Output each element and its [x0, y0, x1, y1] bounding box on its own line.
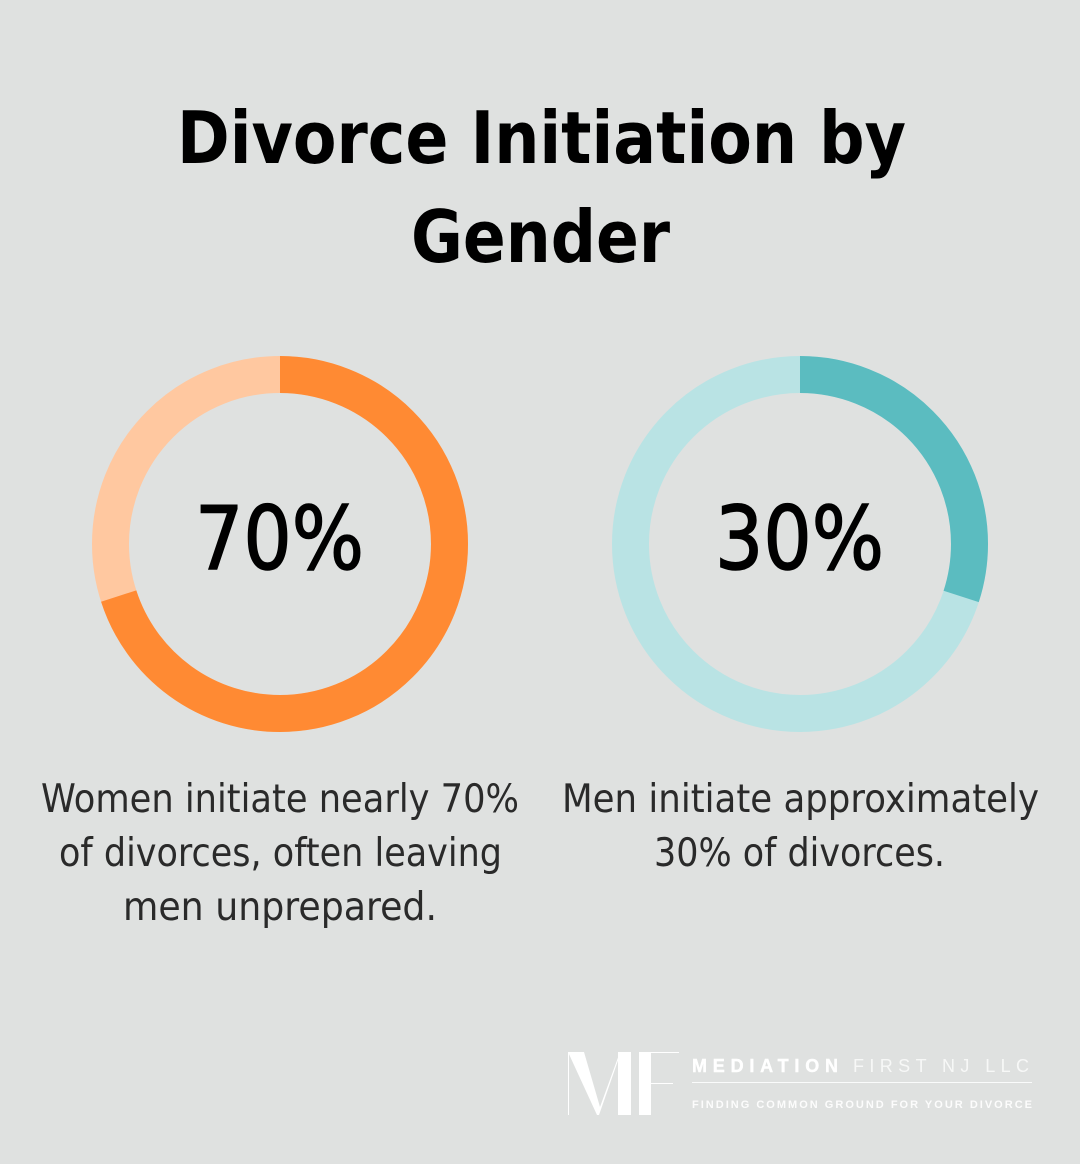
text block: women description: of divorces, often leaving	[59, 831, 502, 876]
company name: FIRST NJ LLC	[853, 1056, 1029, 1076]
text block: men description: 30% of divorces.	[654, 831, 945, 876]
tagline: FINDING COMMON GROUND FOR YOUR DIVORCE	[692, 1099, 1032, 1111]
company name: MEDIATION	[692, 1056, 838, 1076]
text block: women description: men unprepared.	[123, 885, 437, 930]
title: Divorce Initiation by	[177, 96, 906, 180]
text block: women description	[41, 777, 519, 930]
icon: MF monogram	[568, 1052, 679, 1115]
title: Gender	[411, 195, 670, 279]
text block: women description: Women initiate nearly 70%	[41, 777, 519, 822]
panel: men donut chart	[630, 374, 970, 714]
text block: men description	[562, 777, 1039, 876]
panel: men donut chart: 30%	[715, 488, 884, 590]
company name	[692, 1056, 1029, 1076]
panel: women donut chart	[110, 374, 450, 714]
title	[177, 96, 906, 279]
logo: Mediation First NJ LLC	[568, 1052, 1032, 1115]
panel: women donut chart: 70%	[195, 488, 364, 590]
text block: men description: Men initiate approximately	[562, 777, 1039, 822]
